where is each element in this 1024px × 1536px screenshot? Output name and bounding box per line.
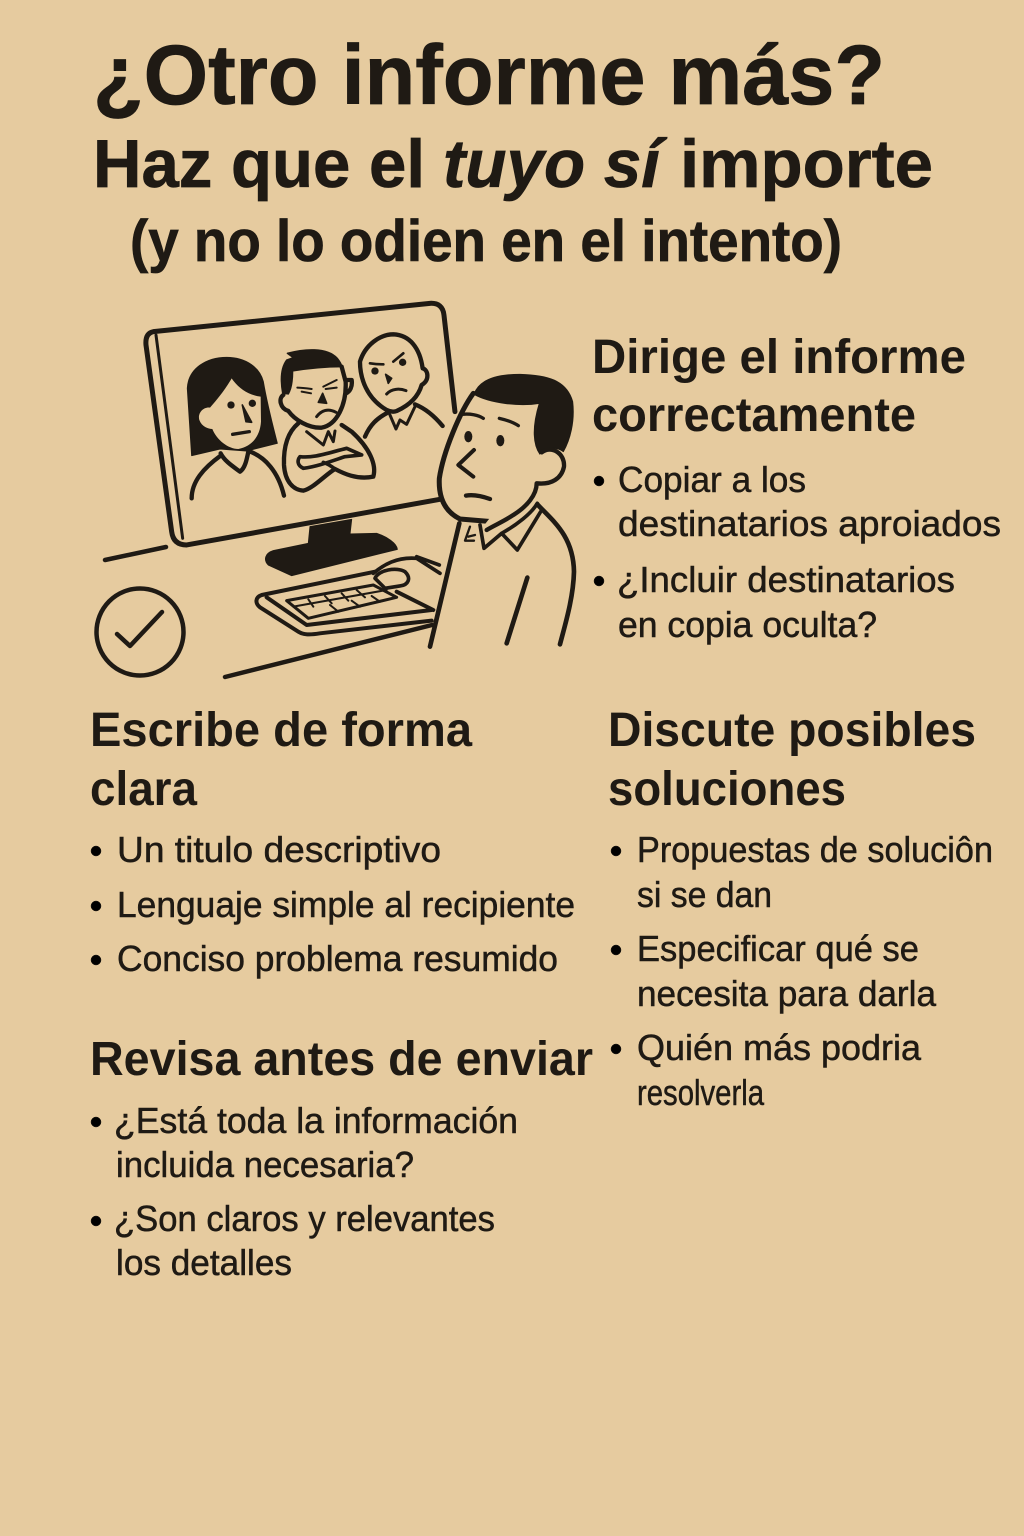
bullet list: necesita para darla	[637, 973, 937, 1014]
bullet list	[611, 829, 993, 1113]
desk lines	[105, 547, 432, 677]
monitor stand	[266, 519, 397, 576]
heading: clara	[90, 763, 197, 816]
bullet list: Propuestas de soluciôn	[637, 829, 993, 870]
bullet list	[91, 829, 575, 979]
heading	[592, 331, 966, 442]
heading: Discute posibles	[608, 704, 976, 757]
bullet list: Especificar qué se	[637, 928, 919, 969]
bullet list	[91, 1100, 518, 1283]
character: man	[420, 374, 574, 647]
subtitle: tuyo sí	[443, 126, 668, 202]
subtitle: Haz que el	[93, 126, 425, 202]
bullet list: ¿Incluir destinatarios	[617, 559, 955, 600]
title: main heading: ¿Otro informe más?	[93, 28, 885, 122]
section: Escribe de forma clara	[90, 704, 575, 979]
recipients on screen	[187, 334, 443, 498]
bullet list: Lenguaje simple al recipiente	[117, 884, 575, 925]
bullet list: destinatarios aproiados	[618, 503, 1001, 544]
heading: correctamente	[592, 389, 916, 442]
illustration: man at a monitor with unhappy recipients	[96, 303, 574, 677]
recipient: woman	[187, 357, 284, 498]
keyboard	[256, 572, 433, 634]
bullet list: ¿Está toda la información	[114, 1100, 518, 1141]
icon: check mark	[96, 588, 184, 676]
heading: soluciones	[608, 763, 846, 816]
subtitle: importe	[680, 126, 933, 202]
section: Revisa antes de enviar	[90, 1033, 593, 1283]
monitor	[146, 303, 455, 545]
bullet list: en copia oculta?	[618, 604, 877, 645]
subtitle parenthetical: (y no lo odien en el intento)	[130, 209, 842, 274]
bullet list: Conciso problema resumido	[117, 938, 558, 979]
bullet list	[594, 459, 1001, 645]
bullet list: los detalles	[116, 1242, 292, 1283]
subtitle	[93, 126, 933, 202]
heading: Revisa antes de enviar	[90, 1033, 593, 1086]
section: Discute posibles soluciones	[608, 704, 993, 1113]
recipient: bald man	[360, 334, 443, 437]
heading: Dirige el informe	[592, 331, 966, 384]
hand on keyboard	[373, 557, 440, 588]
section: Dirige el informe correctamente	[592, 331, 1001, 645]
heading	[608, 704, 976, 816]
bullet list: ¿Son claros y relevantes	[114, 1198, 495, 1239]
bullet list: incluida necesaria?	[116, 1144, 414, 1185]
bullet list: si se dan	[637, 874, 772, 915]
bullet list: resolverla	[637, 1072, 765, 1113]
bullet list: Quién más podria	[637, 1027, 922, 1068]
bullet list: Un titulo descriptivo	[117, 829, 441, 870]
bullet list: Copiar a los	[618, 459, 806, 500]
recipient: man with crossed arms	[281, 350, 374, 491]
heading	[90, 704, 472, 816]
heading: Escribe de forma	[90, 704, 472, 757]
title block	[93, 28, 933, 274]
